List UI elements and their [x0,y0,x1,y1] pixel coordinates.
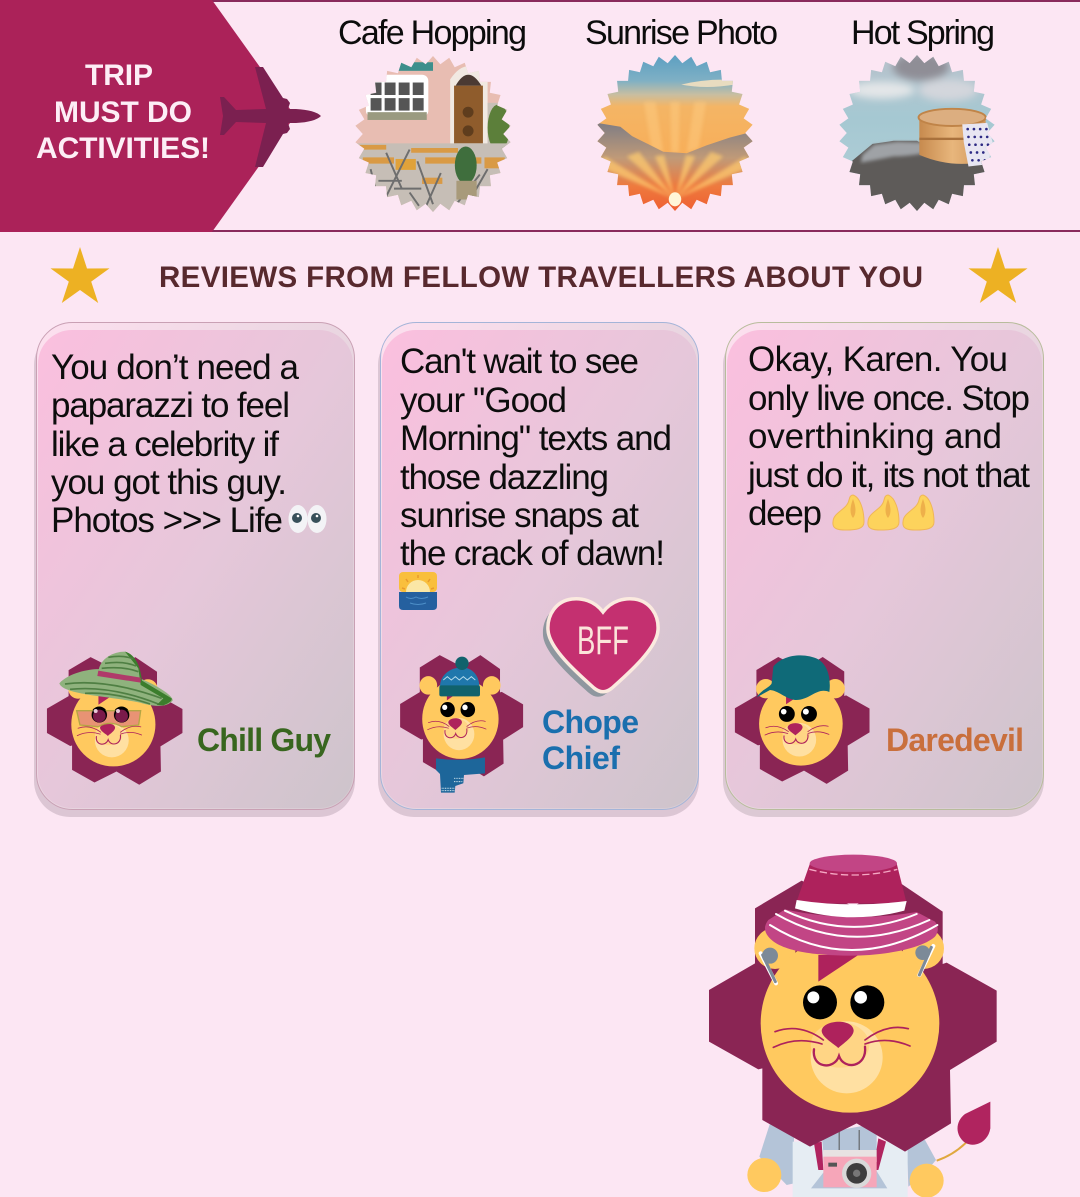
review text: Photos >>> Life [51,501,283,540]
banner title: TRIP [85,59,153,92]
avatar: lion with baseball cap [735,655,870,784]
review text: like a celebrity if [51,425,279,464]
body [747,1123,944,1197]
earbuds [761,945,933,983]
activity label: cafe hopping: Cafe Hopping [338,14,527,52]
review text: You don’t need a [51,348,300,387]
review text: Morning" texts and [400,419,672,458]
banner arrow [0,0,295,232]
review text: Okay, Karen. You [748,340,1008,379]
review text: sunrise snaps at [400,496,639,535]
header band [0,0,1080,232]
review text: your "Good [400,381,567,420]
review text: the crack of dawn! [400,534,665,573]
badge: BFF heart: BFF [577,619,629,663]
review text [51,348,300,540]
photo: cafe terrace [355,56,511,214]
review text: overthinking and [748,417,1002,456]
camera [823,1150,877,1188]
avatar: lion with beanie and scarf [400,655,523,793]
icon: eyes emoji [288,505,326,533]
activity label: hot spring: Hot Spring [851,14,995,52]
review text: those dazzling [400,458,609,497]
banner title: ACTIVITIES! [36,132,210,165]
panel: review Daredevil [723,322,1044,817]
tail [937,1102,990,1161]
activity label: sunrise photo: Sunrise Photo [585,14,778,52]
review text: only live once. Stop [748,379,1030,418]
badge: BFF heart [543,599,658,697]
head [709,881,997,1152]
icon: pinching hands emoji [833,495,934,530]
name label [542,704,639,776]
photo: sunrise [597,55,753,211]
review text: Can't wait to see [400,342,639,381]
review text: just do it, its not that [747,456,1030,495]
name label: Chill Guy [197,722,331,758]
name label: Chief [542,740,620,776]
mascot: lion with bucket hat and camera [709,855,997,1197]
avatar: lion with sun hat [47,652,182,785]
bucket hat [765,855,938,956]
panel: review Chill Guy [34,322,355,817]
icon: airplane [220,67,321,167]
review text: paparazzi to feel [51,386,290,425]
banner title [36,59,210,165]
name label: Daredevil [886,722,1024,758]
icon: right star [968,247,1028,303]
icon: sunrise emoji [399,572,437,610]
section heading row [50,247,1028,303]
review text: deep [748,494,822,533]
review text [747,340,1030,533]
name label: Chope [542,704,639,740]
review text: you got this guy. [51,463,287,502]
banner title: MUST DO [54,96,192,129]
review text [400,342,672,573]
heading text: REVIEWS FROM FELLOW TRAVELLERS ABOUT YOU [159,261,923,294]
icon: left star [50,247,110,303]
photo: hot spring [839,53,995,211]
panel: review Chope Chief [378,322,699,817]
